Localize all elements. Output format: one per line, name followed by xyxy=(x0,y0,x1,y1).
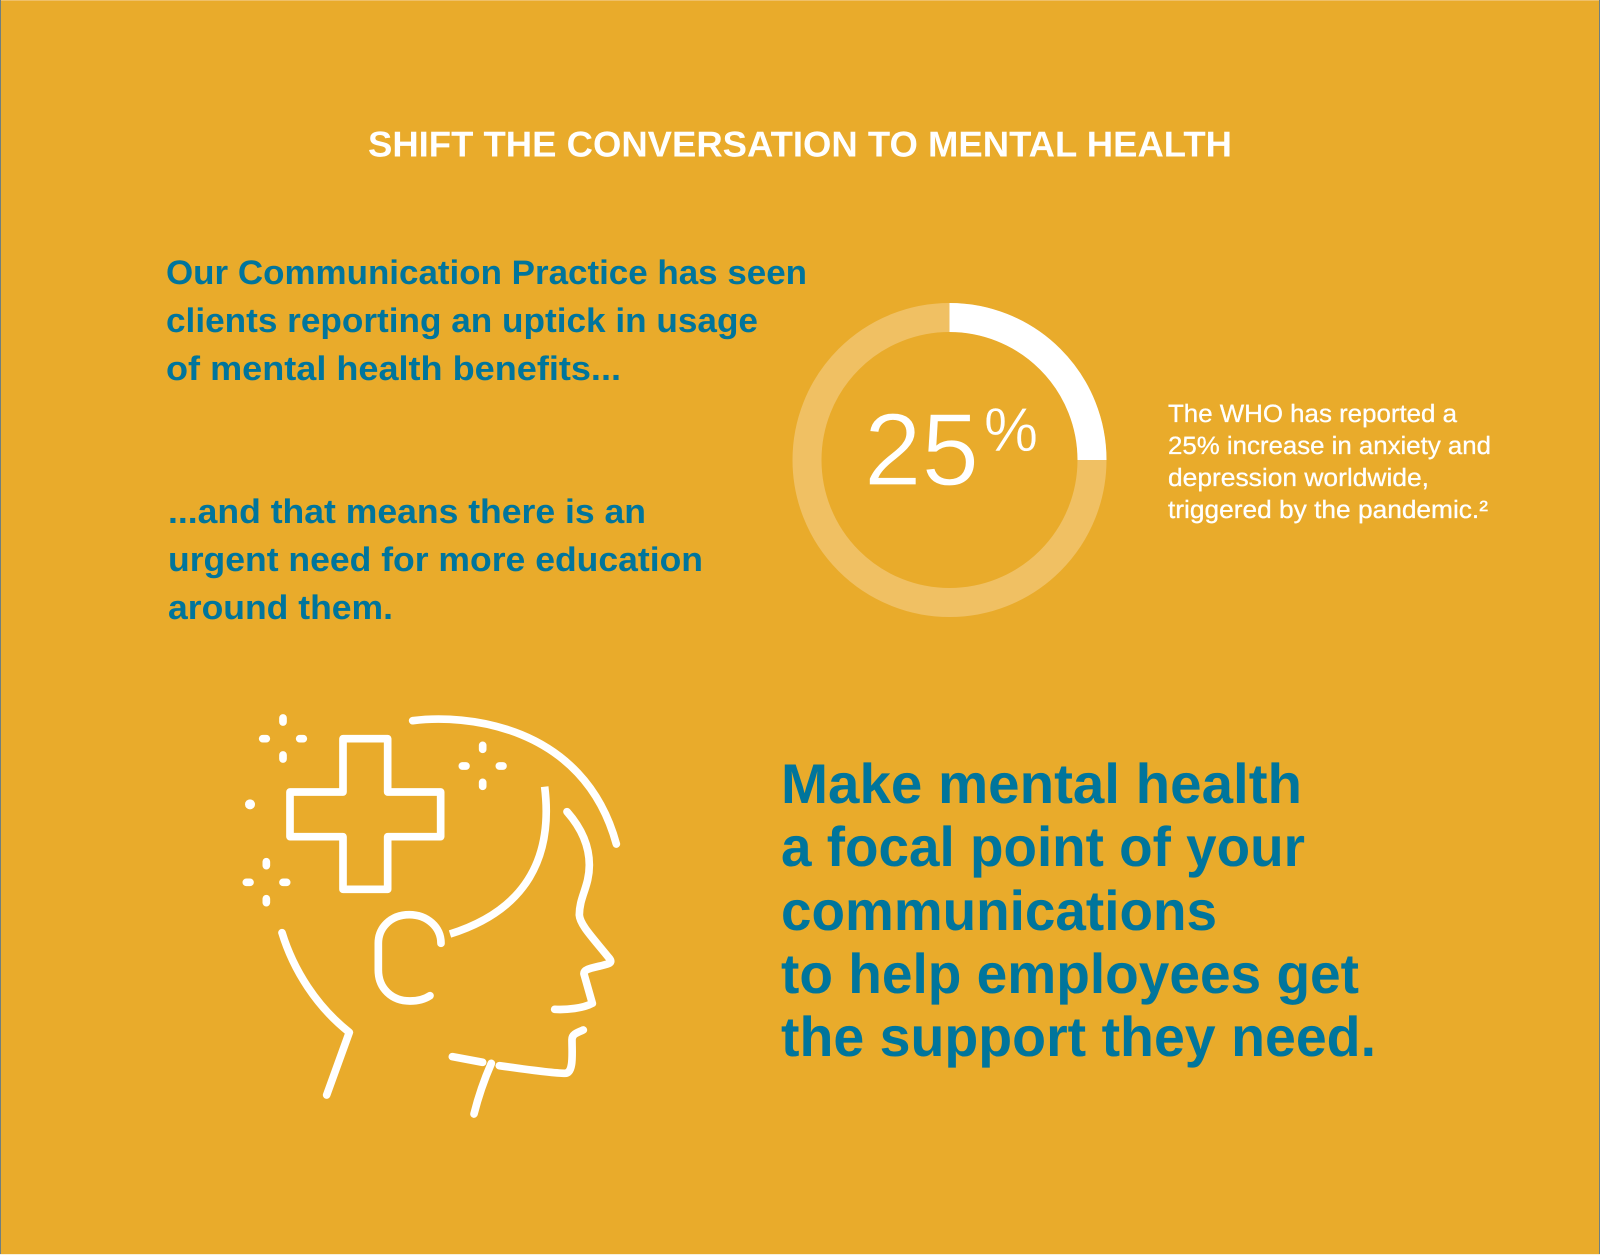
icon part: neck front xyxy=(474,1063,491,1114)
icon part: inner head arc xyxy=(450,787,546,934)
call to action text: a focal point of your xyxy=(781,815,1305,878)
icon part: dot xyxy=(245,799,255,809)
text block: urgent need for education: around them. xyxy=(168,589,393,627)
icon part: sparkles xyxy=(246,718,503,903)
donut value: 25%: % xyxy=(984,396,1038,465)
icon part: chin and jaw xyxy=(499,1030,583,1073)
donut chart: 25 percent xyxy=(807,318,1092,602)
text block: communication practice xyxy=(166,254,807,388)
text block: WHO statistic: The WHO has reported a xyxy=(1168,400,1457,428)
call to action text: the support they need. xyxy=(781,1005,1376,1068)
icon part: ear xyxy=(378,915,441,1001)
donut value: 25% xyxy=(864,392,1038,507)
call to action text: Make mental health xyxy=(781,752,1302,815)
icon part: back of head and neck xyxy=(282,933,349,1095)
icon part: face profile xyxy=(555,812,611,1009)
title: SHIFT THE CONVERSATION TO MENTAL HEALTH xyxy=(368,124,1232,164)
text block: communication practice: Our Communication Practice has seen xyxy=(166,254,807,292)
icon part: hair arc xyxy=(413,719,616,844)
text block: urgent need for education xyxy=(168,493,703,627)
text block: WHO statistic: triggered by the pandemic.² xyxy=(1168,496,1488,524)
text block: WHO statistic: 25% increase in anxiety and xyxy=(1168,432,1491,460)
text block: communication practice: of mental health benefits... xyxy=(166,350,621,388)
text block: WHO statistic: depression worldwide, xyxy=(1168,464,1429,492)
text block: WHO statistic xyxy=(1168,400,1491,524)
call to action text xyxy=(781,752,1376,1068)
call to action text: communications xyxy=(781,879,1217,942)
icon: head with medical cross xyxy=(245,718,616,1114)
donut value: 25%: 25 xyxy=(864,392,979,507)
call to action text: to help employees get xyxy=(781,942,1359,1005)
text block: urgent need for education: ...and that means there is an xyxy=(168,493,646,531)
icon part: jaw left segment xyxy=(452,1057,483,1062)
text block: communication practice: clients reporting an uptick in usage xyxy=(166,302,758,340)
icon part: medical cross xyxy=(290,739,441,889)
text block: urgent need for education: urgent need for more education xyxy=(168,541,703,579)
